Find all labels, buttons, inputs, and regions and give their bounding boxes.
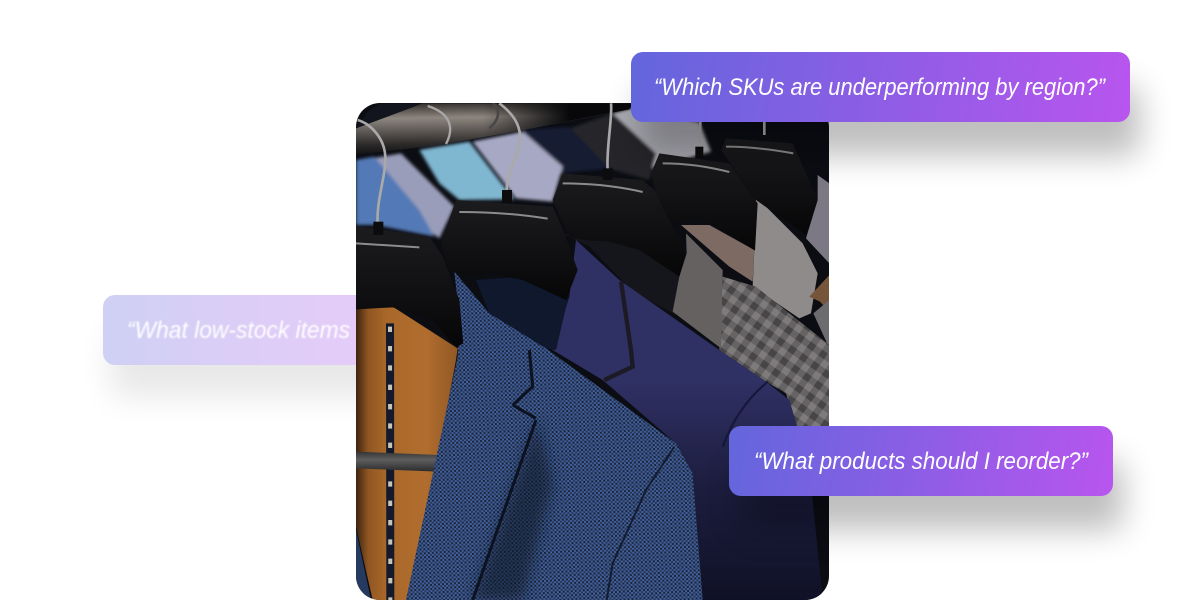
dark shadow behind hangers	[563, 233, 679, 315]
light blue shirt	[419, 142, 514, 200]
hanger highlights	[356, 147, 793, 247]
metal rod	[356, 452, 439, 472]
dark shirt collar at back	[566, 113, 656, 180]
blue check jacket left	[356, 157, 434, 237]
question bubble: SKUs by region	[631, 52, 1140, 156]
light gray jacket	[753, 197, 818, 318]
front jacket lapel soft shadow	[473, 420, 553, 600]
hanger five	[721, 138, 818, 235]
orange lining	[356, 307, 458, 600]
pale lavender shirt left	[373, 153, 454, 238]
metal clothes rail	[356, 103, 633, 155]
dark upper corner behind rail	[356, 103, 423, 128]
question bubble: reorder: “What products should I reorder?”	[754, 448, 1089, 475]
lavender shirt	[473, 132, 563, 202]
photo: suit jackets on hangers	[356, 103, 829, 600]
hanger hooks	[358, 103, 764, 225]
ring on rail	[428, 106, 450, 144]
hanger three	[553, 173, 686, 277]
lower left jacket corner	[356, 530, 371, 600]
faded question bubble: low-stock items	[103, 295, 356, 402]
plaid jacket	[719, 277, 829, 428]
rail fade to dark	[488, 104, 631, 135]
front blue jacket	[406, 272, 703, 600]
lower right gray	[813, 300, 829, 348]
hanger collars	[373, 147, 703, 235]
patterned lining strip	[386, 323, 394, 600]
navy sleeve seam	[723, 382, 768, 447]
background shirts	[356, 108, 711, 238]
hanger two	[441, 200, 578, 300]
navy jacket lapel edge	[604, 282, 633, 380]
tan shirt	[681, 225, 754, 282]
hook ring at rail	[489, 103, 498, 128]
front jacket sleeve seam	[607, 447, 674, 600]
gray lapel	[673, 233, 723, 348]
navy shirt at back	[523, 127, 609, 180]
front jacket lapel shadow	[473, 350, 536, 600]
brown stripe	[810, 276, 829, 305]
right gray jacket	[806, 175, 829, 263]
faded question bubble: low-stock items: “What low-stock items	[127, 317, 350, 344]
question bubble: SKUs by region: “Which SKUs are underperforming by region?”	[654, 74, 1106, 101]
lining strip dots	[388, 326, 392, 600]
hanger one	[356, 227, 463, 347]
navy jacket	[553, 240, 823, 600]
dark inner collar	[476, 277, 568, 350]
light gray shirt at back	[613, 108, 711, 168]
question bubble: reorder	[729, 426, 1123, 530]
hanger four	[651, 153, 758, 251]
